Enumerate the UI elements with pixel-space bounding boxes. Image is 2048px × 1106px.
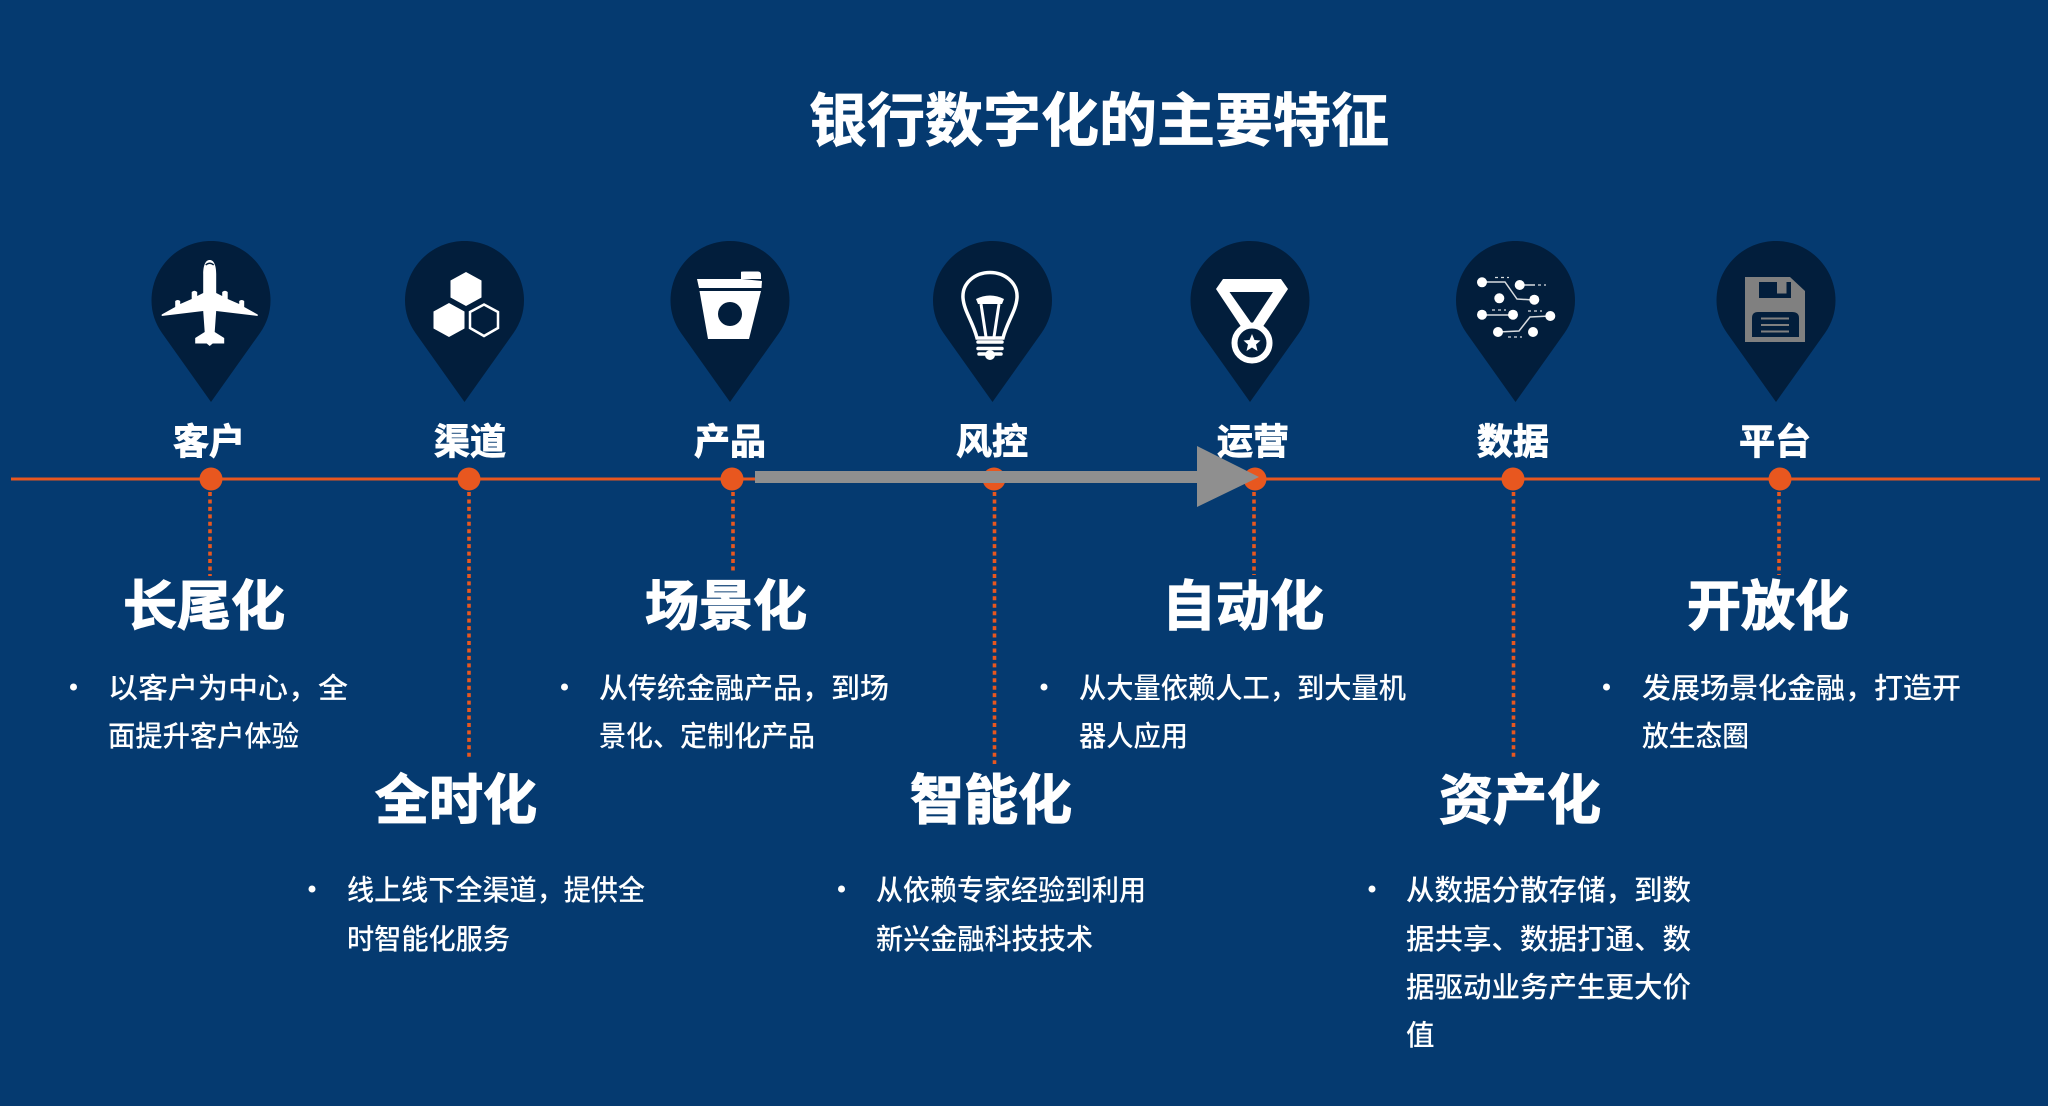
- feature: 场景化: 场景化: [645, 577, 807, 637]
- map pin: 产品 with cup icon: [670, 241, 790, 402]
- title: 银行数字化的主要特征: [809, 89, 1389, 154]
- feature: 长尾化: [70, 577, 348, 753]
- feature: 资产化: [1368, 771, 1691, 1052]
- timeline nodes: [200, 468, 1792, 490]
- feature: 智能化: 从依赖专家经验到利用: [876, 875, 1146, 907]
- category label: 数据: 数据: [1477, 421, 1549, 462]
- feature: 自动化: [1040, 577, 1406, 753]
- feature: 场景化: 景化、定制化产品: [599, 721, 815, 753]
- feature: 资产化: 资产化: [1439, 771, 1601, 831]
- feature: 场景化: 从传统金融产品，到场: [599, 673, 889, 705]
- feature: 自动化: 器人应用: [1079, 721, 1188, 753]
- progress arrow: [755, 446, 1259, 507]
- feature: 全时化: 线上线下全渠道，提供全: [347, 875, 645, 907]
- feature: 长尾化: 以客户为中心，全: [108, 673, 348, 705]
- feature: 开放化: 开放化: [1687, 577, 1849, 637]
- category label: 平台: 平台: [1739, 421, 1811, 462]
- feature: 开放化: 发展场景化金融，打造开: [1642, 673, 1961, 705]
- feature: 长尾化: 长尾化: [123, 577, 285, 637]
- map pin: 运营 with medal icon: [1190, 241, 1310, 402]
- category label: 风控: 风控: [956, 421, 1028, 462]
- feature: 开放化: 放生态圈: [1642, 721, 1749, 753]
- feature: 全时化: 时智能化服务: [347, 924, 510, 956]
- map pin: 数据 with circuit icon: [1456, 241, 1575, 402]
- feature: 智能化: 新兴金融科技技术: [876, 924, 1093, 956]
- feature: 资产化: 值: [1406, 1020, 1435, 1052]
- timeline connectors: [210, 492, 1779, 764]
- map pin: 平台 with floppy disk icon: [1716, 241, 1836, 402]
- timeline axis: [11, 478, 2040, 480]
- feature: 全时化: [308, 771, 645, 956]
- feature: 全时化: 全时化: [375, 771, 537, 831]
- feature: 智能化: [838, 771, 1146, 956]
- feature: 自动化: 从大量依赖人工，到大量机: [1079, 673, 1406, 705]
- feature: 资产化: 据驱动业务产生更大价: [1406, 972, 1691, 1004]
- map pin: 客户 with airplane icon: [152, 241, 270, 402]
- feature: 资产化: 据共享、数据打通、数: [1406, 924, 1691, 956]
- feature: 长尾化: 面提升客户体验: [108, 721, 299, 753]
- map pin: 风控 with light bulb icon: [933, 241, 1052, 402]
- map pin: 渠道 with hexagons icon: [405, 241, 524, 402]
- category label: 客户: 客户: [173, 421, 245, 462]
- feature: 自动化: 自动化: [1162, 577, 1324, 637]
- feature: 场景化: [561, 577, 889, 753]
- feature: 智能化: 智能化: [910, 771, 1072, 831]
- category label: 运营: 运营: [1217, 421, 1289, 462]
- feature: 资产化: 从数据分散存储，到数: [1406, 875, 1691, 907]
- feature: 开放化: [1603, 577, 1961, 753]
- category label: 产品: 产品: [694, 421, 766, 462]
- category label: 渠道: 渠道: [434, 421, 506, 462]
